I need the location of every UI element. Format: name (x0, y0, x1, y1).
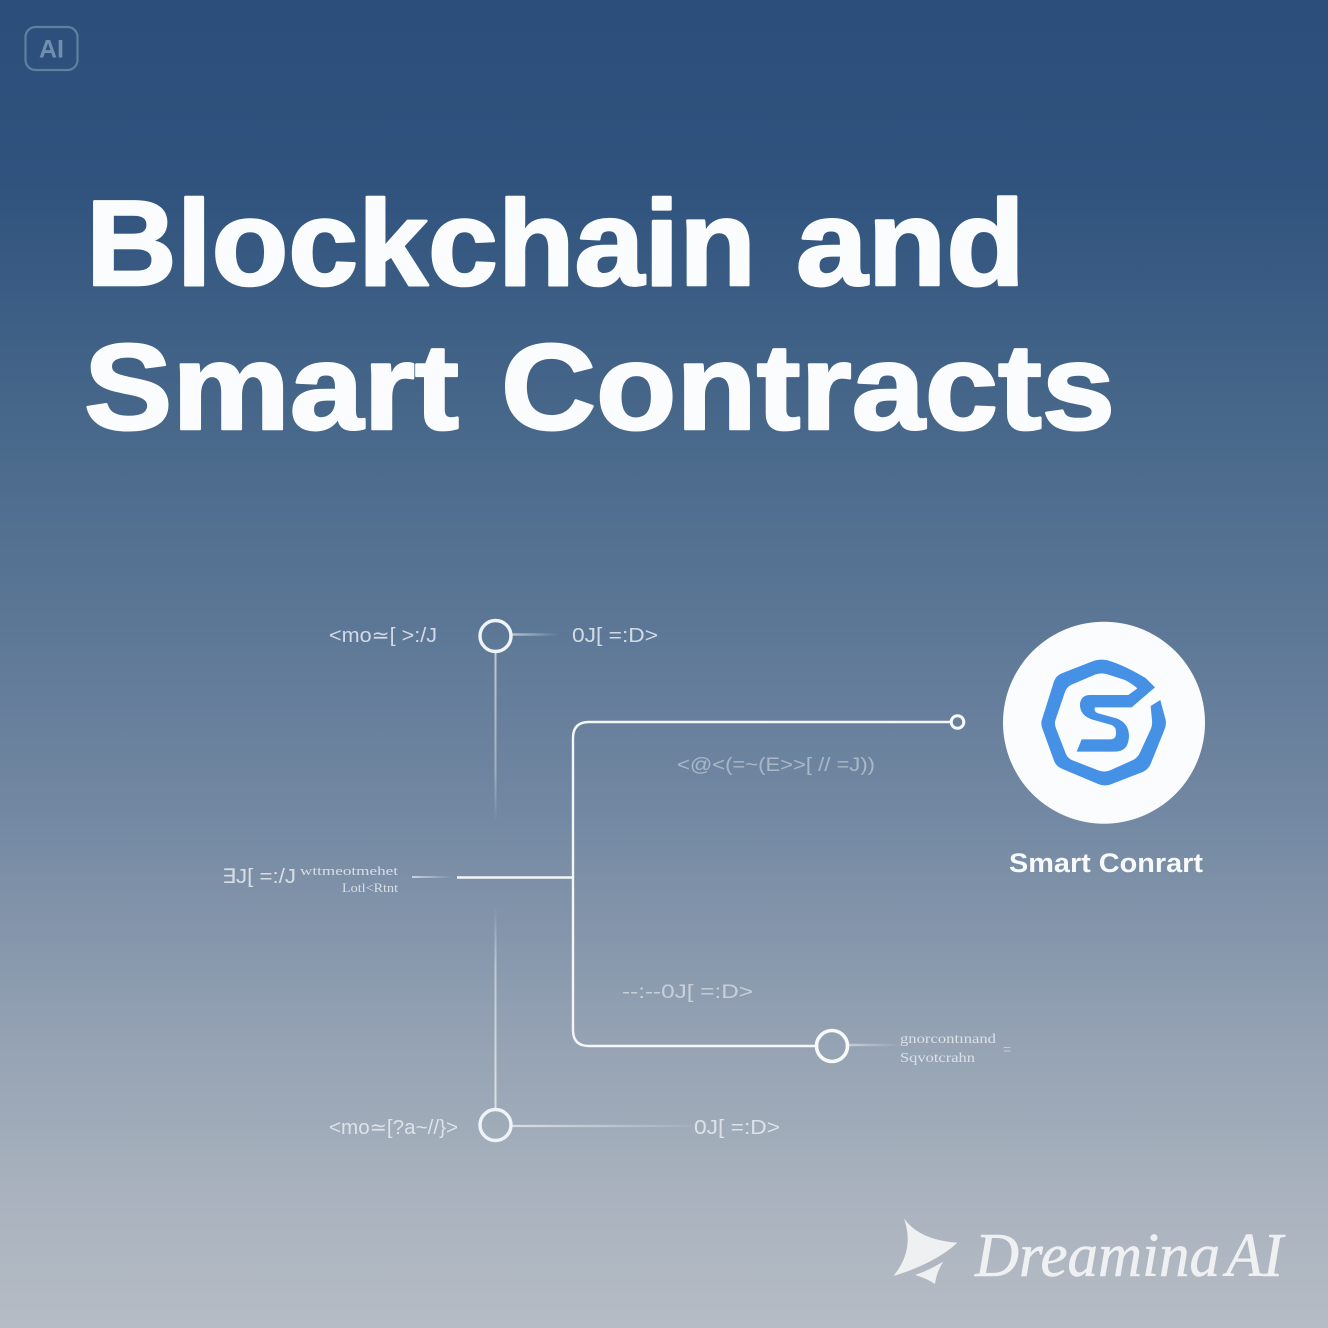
code labels: --:--0J[ =:D> (622, 982, 753, 1003)
watermark logo (893, 1218, 1286, 1290)
code labels: <@<(=~(E>>[ // =J)) (677, 755, 875, 776)
AI badge (26, 27, 78, 70)
flow diagram connectors (412, 634, 951, 1126)
code labels: Lotl<Rtnt (342, 880, 398, 895)
code labels: <mo≃[ >:/J (329, 625, 437, 647)
code labels: Sqvotcrahn (900, 1051, 975, 1066)
title: Contracts (501, 319, 1115, 455)
title: Blockchain (86, 175, 756, 311)
AI badge: AI (39, 36, 64, 64)
code labels: = (1003, 1041, 1011, 1057)
code labels: <mo≃[?a~//}> (329, 1117, 458, 1139)
node: upper branch end dot (951, 716, 964, 728)
title: and (796, 175, 1025, 311)
code labels: 0J[ =:D> (572, 625, 658, 647)
code labels: 0J[ =:D> (694, 1117, 780, 1139)
code labels: gnorcontınand (900, 1032, 996, 1047)
watermark logo: Dreamina (974, 1222, 1220, 1290)
smart contract icon (1003, 622, 1205, 824)
node: bottom circle (480, 1110, 511, 1140)
title (84, 175, 1115, 455)
watermark logo: AI (1222, 1222, 1286, 1290)
code labels: wttmeotmehet (300, 863, 399, 878)
code labels (222, 625, 1011, 1139)
node: lower branch circle (816, 1030, 848, 1062)
node: top circle (480, 620, 511, 652)
smart contract label: Smart Conrart (1009, 848, 1203, 878)
code labels: ∃J[ =:/J (222, 866, 296, 888)
title: Smart (84, 319, 459, 455)
